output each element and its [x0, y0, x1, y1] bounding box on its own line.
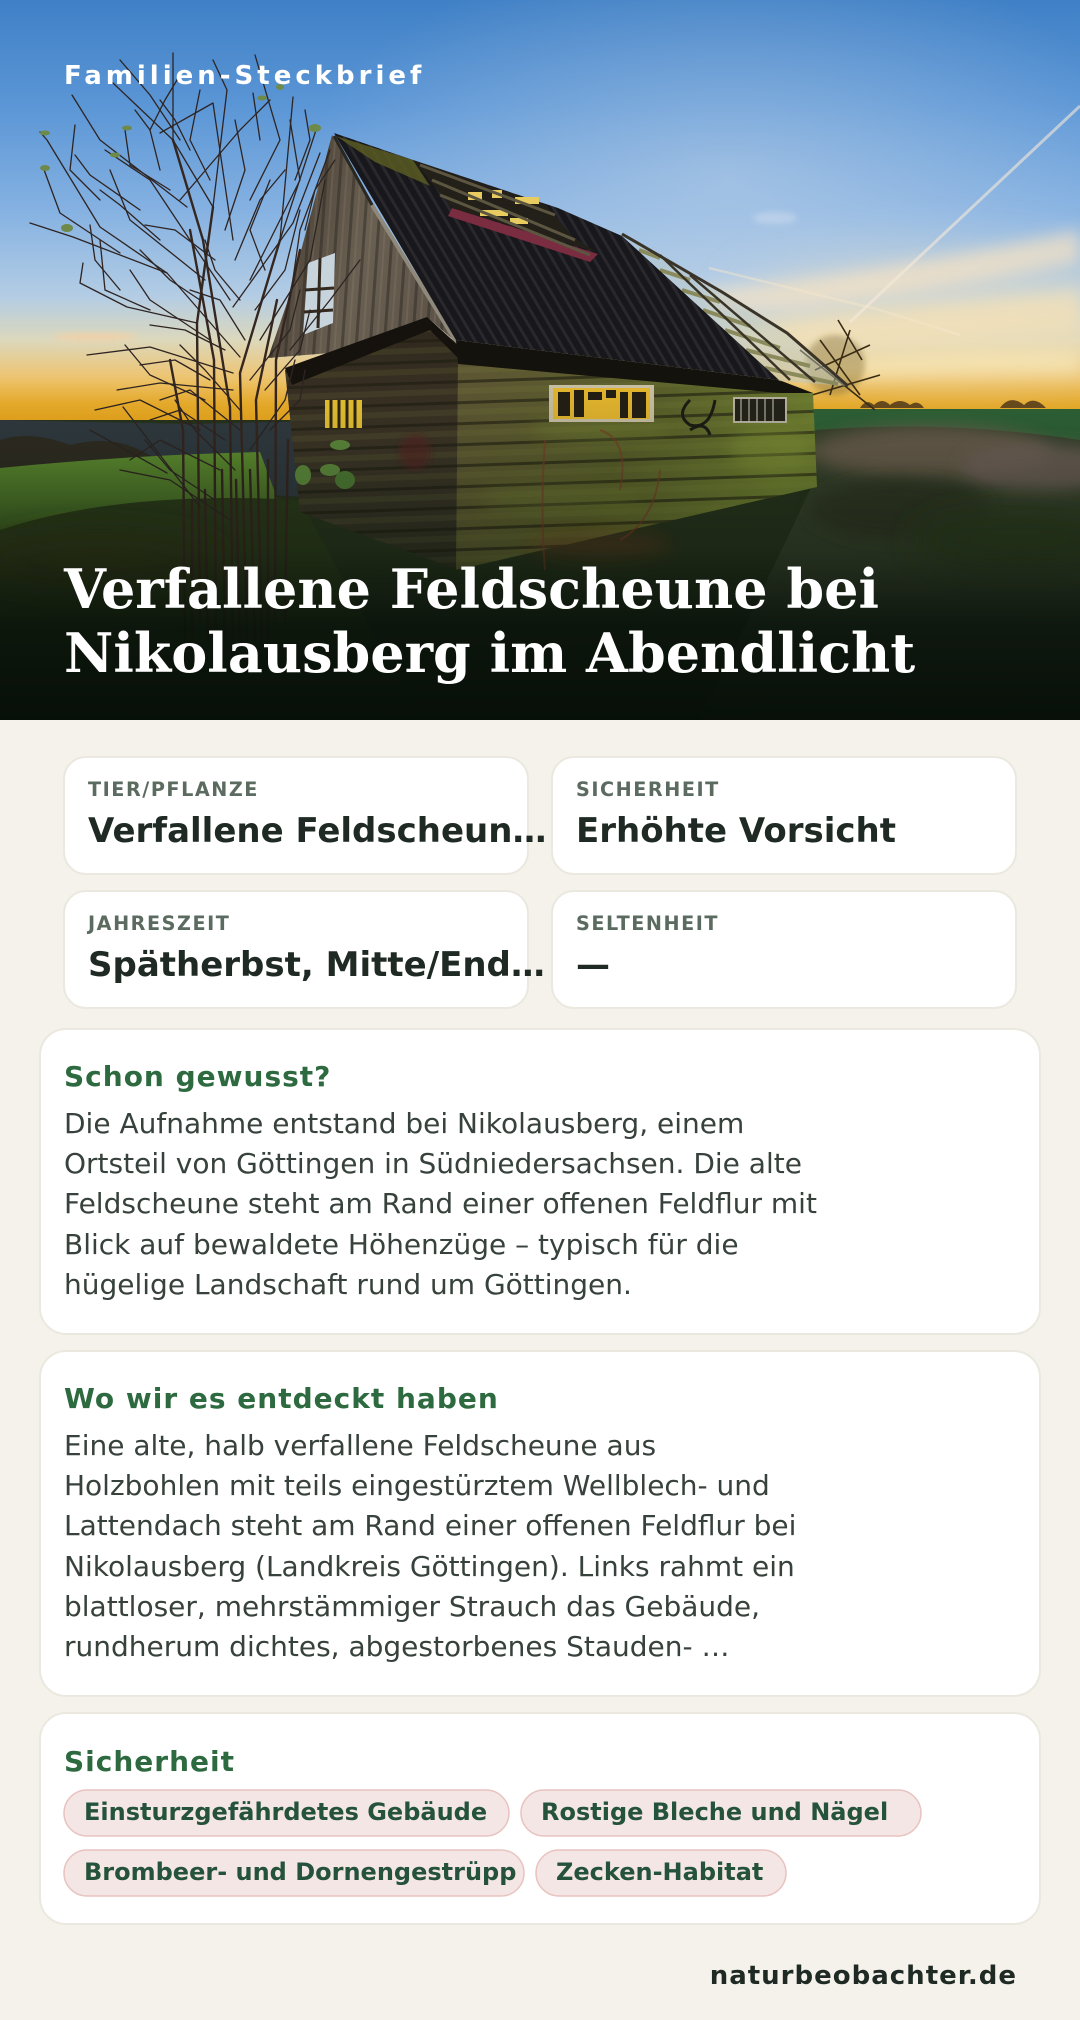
body text: Wo wir es entdeckt haben: rundherum dichtes, abgestorbenes Stauden- … — [64, 1630, 729, 1663]
sky — [0, 0, 1080, 425]
heading: Schon gewusst: Schon gewusst? — [64, 1060, 331, 1093]
panel: Wo wir es entdeckt haben — [40, 1351, 1040, 1696]
fact card: Jahreszeit — [64, 891, 545, 1008]
footer brand: naturbeobachter.de — [710, 1961, 1017, 1991]
barn right wall — [456, 340, 817, 570]
body text: Wo wir es entdeckt haben: Eine alte, halb verfallene Feldscheune aus — [64, 1429, 656, 1462]
panel: Sicherheit — [40, 1713, 1040, 1924]
barn left wall — [285, 317, 459, 570]
barn gable — [268, 135, 458, 358]
fact card: Tier/Pflanze: TIER/PFLANZE — [88, 778, 259, 801]
pill: Rostige Bleche und Nägel — [521, 1790, 921, 1836]
panel: Schon gewusst — [40, 1029, 1040, 1334]
fact card: Tier/Pflanze — [64, 757, 546, 874]
pill: Brombeer- und Dornengestrüpp: Brombeer- und Dornengestrüpp — [84, 1858, 516, 1886]
fact card: Sicherheit — [552, 757, 1016, 874]
body text: Schon gewusst: Die Aufnahme entstand bei Nikolausberg, einem — [64, 1107, 744, 1140]
fact card: Tier/Pflanze: Verfallene Feldscheun… — [88, 811, 546, 851]
body text: Wo wir es entdeckt haben — [64, 1429, 796, 1663]
title: Nikolausberg im Abendlicht — [64, 621, 915, 685]
bush right of barn — [800, 320, 880, 410]
barn — [268, 133, 848, 570]
kicker: Familien-Steckbrief: Familien-Steckbrief — [64, 61, 425, 91]
shrub leaves — [40, 84, 355, 489]
barn corrugated roof — [334, 133, 779, 380]
fact card: Seltenheit: SELTENHEIT — [576, 912, 719, 935]
pill: Zecken-Habitat: Zecken-Habitat — [556, 1858, 763, 1886]
pill: Einsturzgefährdetes Gebäude — [64, 1790, 509, 1836]
dark gradient overlay — [0, 380, 1080, 720]
title: Verfallene Feldscheune bei — [63, 557, 879, 621]
body text: Wo wir es entdeckt haben: blattloser, mehrstämmiger Strauch das Gebäude, — [64, 1590, 760, 1623]
barn open roof slats right — [622, 234, 848, 386]
fact card: Jahreszeit: JAHRESZEIT — [86, 912, 230, 935]
distant hills and fields — [0, 400, 1080, 720]
body text: Wo wir es entdeckt haben: Lattendach steht am Rand einer offenen Feldflur bei — [64, 1509, 796, 1542]
fact card: Jahreszeit: Spätherbst, Mitte/End… — [88, 945, 545, 985]
body text: Wo wir es entdeckt haben: Holzbohlen mit teils eingestürztem Wellblech- und — [64, 1469, 770, 1502]
heading: Sicherheit: Sicherheit — [64, 1745, 235, 1778]
pill: Brombeer- und Dornengestrüpp — [64, 1850, 524, 1896]
heading: Wo wir es entdeckt haben: Wo wir es entdeckt haben — [64, 1382, 499, 1415]
pill: Einsturzgefährdetes Gebäude: Einsturzgefährdetes Gebäude — [84, 1798, 487, 1826]
hero photo: abandoned barn at sunset — [0, 0, 1080, 720]
title — [63, 557, 915, 685]
body text: Schon gewusst: Ortsteil von Göttingen in Südniedersachsen. Die alte — [64, 1147, 802, 1180]
pill: Zecken-Habitat — [536, 1850, 786, 1896]
body text: Schon gewusst — [64, 1107, 817, 1301]
clouds and contrails — [53, 106, 1080, 380]
bare shrub left of barn — [30, 53, 360, 640]
fact card: Seltenheit — [552, 891, 1016, 1008]
ground vegetation — [0, 426, 1080, 720]
body text: Schon gewusst: Feldscheune steht am Rand einer offenen Feldflur mit — [64, 1187, 817, 1220]
pill: Rostige Bleche und Nägel: Rostige Bleche und Nägel — [541, 1798, 888, 1826]
fact card: Sicherheit: SICHERHEIT — [576, 778, 720, 801]
body text: Wo wir es entdeckt haben: Nikolausberg (Landkreis Göttingen). Links rahmt ein — [64, 1550, 795, 1583]
fact card: Seltenheit: — — [576, 945, 610, 985]
body text: Schon gewusst: Blick auf bewaldete Höhenzüge – typisch für die — [64, 1228, 739, 1261]
fact card: Sicherheit: Erhöhte Vorsicht — [576, 811, 896, 851]
body text: Schon gewusst: hügelige Landschaft rund um Göttingen. — [64, 1268, 632, 1301]
